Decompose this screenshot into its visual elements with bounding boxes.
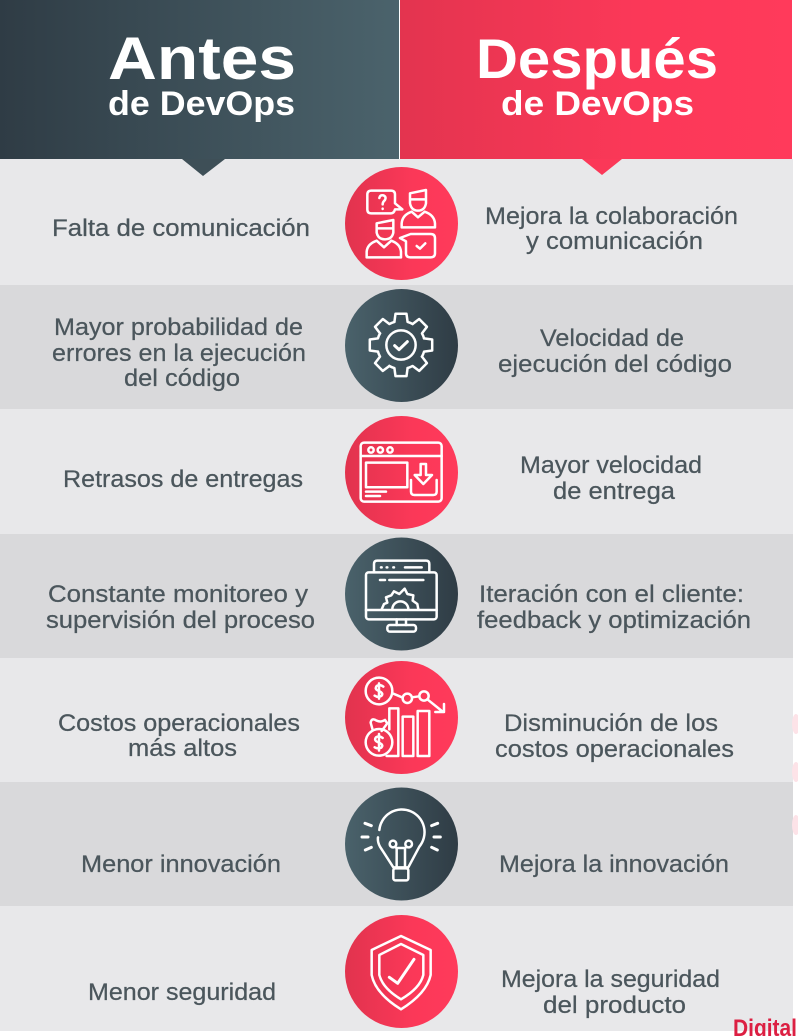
- heading: Después: Después: [476, 27, 718, 90]
- text: despues row 7: Mejora la seguridad: [501, 966, 720, 993]
- text: despues row 2: ejecución del código: [498, 351, 732, 378]
- text: antes row 1: Falta de comunicación: [52, 215, 310, 242]
- icon: money and falling bars: [345, 661, 458, 774]
- text: despues row 3: de entrega: [553, 478, 676, 505]
- text: antes row 7: Menor seguridad: [88, 979, 276, 1006]
- text: antes row 6: Menor innovación: [81, 851, 281, 878]
- text: despues row 5: [495, 710, 734, 763]
- text: despues row 5: costos operacionales: [495, 736, 734, 763]
- text: antes row 5: [58, 710, 300, 762]
- icon: shield with check: [345, 915, 458, 1028]
- text: despues row 5: Disminución de los: [504, 710, 718, 737]
- text: despues row 4: [477, 581, 751, 634]
- text: antes row 2: errores en la ejecución: [52, 340, 306, 367]
- text: despues row 7: [501, 966, 720, 1019]
- text: antes row 5: Costos operacionales: [58, 710, 300, 737]
- text: despues row 2: Velocidad de: [540, 325, 684, 352]
- text: despues row 4: Iteración con el cliente:: [479, 581, 744, 608]
- text: antes row 3: Retrasos de entregas: [63, 466, 303, 493]
- text: despues row 4: feedback y optimización: [477, 607, 751, 634]
- text: despues row 3: [520, 452, 702, 505]
- icon: gear with check: [345, 289, 458, 402]
- text: despues row 3: Mayor velocidad: [520, 452, 702, 479]
- subheading: de DevOps left: de DevOps: [108, 85, 295, 123]
- text: antes row 4: supervisión del proceso: [46, 607, 315, 634]
- text: despues row 2: [498, 325, 732, 378]
- heading: Antes: Antes: [108, 25, 296, 92]
- text: antes row 4: Constante monitoreo y: [48, 581, 308, 608]
- text: antes row 2: [52, 314, 306, 392]
- panel: header Después de DevOps: [400, 0, 792, 175]
- text: despues row 7: del producto: [543, 992, 686, 1019]
- decorative pink marks at right edge: [792, 714, 798, 835]
- icon: communication people and speech bubbles: [345, 167, 458, 280]
- text: despues row 1: y comunicación: [526, 228, 703, 255]
- icon: light bulb: [345, 788, 458, 900]
- icon: browser window with download: [345, 416, 458, 529]
- text: despues row 6: Mejora la innovación: [499, 851, 729, 878]
- panel: header Antes de DevOps: [0, 0, 399, 176]
- text: antes row 4: [46, 581, 315, 634]
- text: despues row 1: [485, 203, 738, 255]
- text: antes row 2: Mayor probabilidad de: [54, 314, 303, 341]
- text: despues row 1: Mejora la colaboración: [485, 203, 738, 230]
- text: antes row 2: del código: [124, 365, 240, 392]
- icon: monitor with gear: [345, 538, 458, 650]
- text: antes row 5: más altos: [128, 735, 237, 762]
- subheading: de DevOps right: de DevOps: [501, 85, 694, 123]
